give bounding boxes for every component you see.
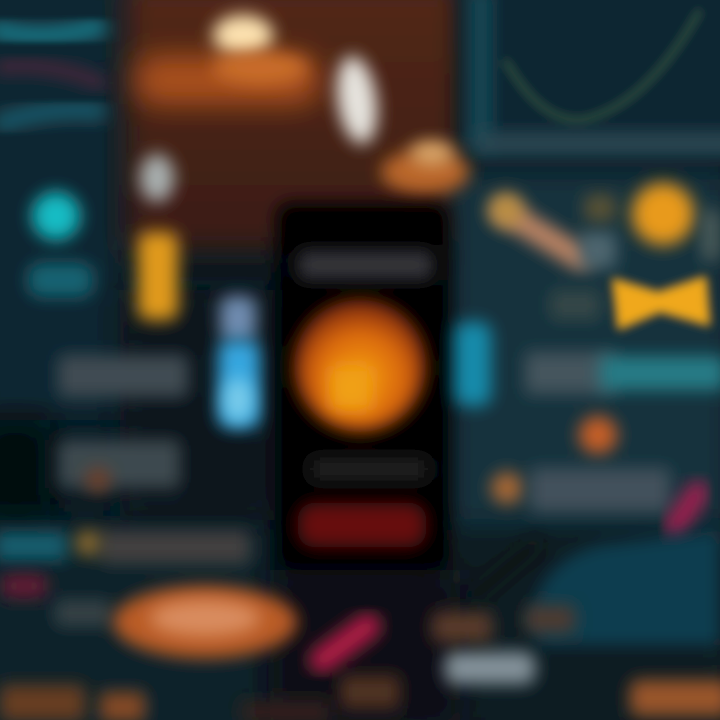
icon: blue bottle <box>218 296 260 428</box>
icon: yellow bow <box>612 276 710 330</box>
phone red button <box>298 503 426 547</box>
orange glowing dish <box>113 586 297 658</box>
icon: orange dome <box>381 141 469 194</box>
right grey bar <box>530 468 670 512</box>
teal mound <box>530 530 720 645</box>
pink diagonal centre <box>322 626 368 660</box>
dark diagonal <box>470 540 540 600</box>
icon: cyan circle <box>32 192 80 240</box>
icon: white tag <box>332 54 382 146</box>
left teal bar <box>28 263 93 297</box>
panel: left column lines <box>0 25 105 125</box>
pink diagonal right <box>674 492 698 528</box>
phone heading <box>298 250 433 280</box>
icon: cyan bottle <box>455 322 491 406</box>
panel: top right chart <box>470 0 720 156</box>
arrow: peach stroke <box>505 212 580 258</box>
phone text <box>310 458 428 480</box>
icon: orange dot top <box>579 416 617 454</box>
icon: orange lock circle <box>294 300 426 432</box>
phone <box>276 202 450 570</box>
bottom items <box>0 605 720 720</box>
ceiling lamp glow <box>135 15 320 105</box>
icon: orange dot lower <box>491 472 523 504</box>
left grey text blocks <box>0 355 250 626</box>
panel: right illustration <box>489 183 720 330</box>
icon: yellow circle <box>632 183 694 245</box>
icon: white capsule <box>140 154 174 202</box>
icon: yellow bottle <box>138 232 178 320</box>
right text bar <box>525 352 720 394</box>
